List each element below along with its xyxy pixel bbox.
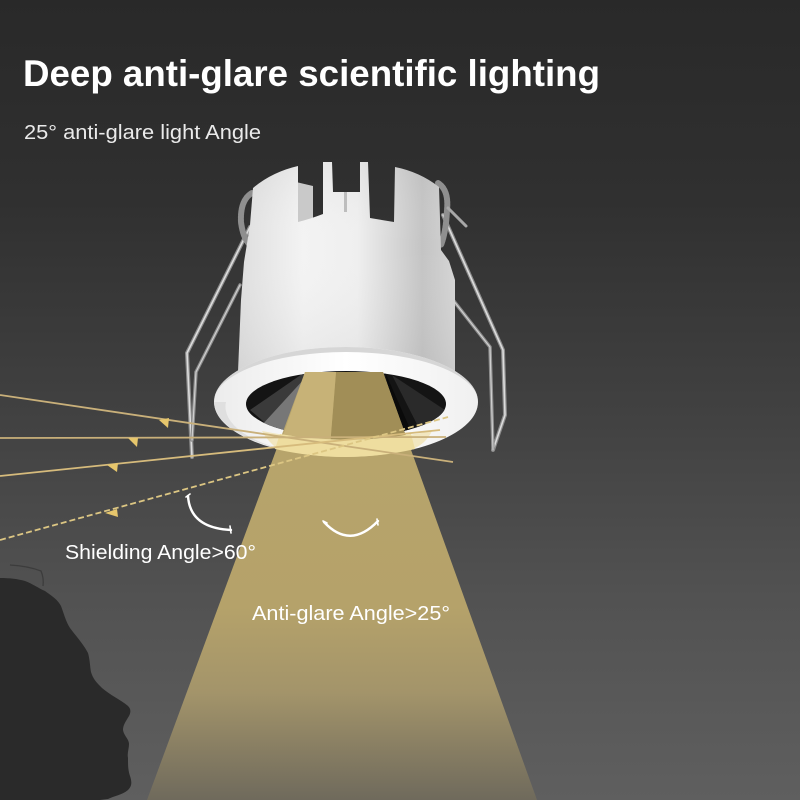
reflector facets: [250, 374, 444, 431]
head profile: [0, 578, 131, 800]
title: Deep anti-glare scientific lighting: [23, 53, 600, 94]
ray 1: [0, 395, 453, 462]
ray direction arrowheads: [105, 418, 169, 517]
ring upper rim shade: [214, 347, 478, 402]
silhouette: human face: [0, 565, 131, 800]
hair wisps: [10, 565, 43, 586]
housing shading: [238, 162, 455, 372]
light beam: [147, 372, 537, 800]
ray 4: dashed shielding line: [0, 417, 448, 540]
beam lower cone: [147, 372, 537, 800]
trim ring: [214, 347, 478, 457]
beam inside reflector, right side: [330, 372, 410, 447]
arc arrow: shielding angle: [186, 494, 231, 533]
spring clip: left: [187, 193, 252, 457]
beam inside reflector, left side: [279, 372, 336, 447]
spring clip: right: [438, 183, 505, 450]
inner wall of the housing: [296, 182, 313, 224]
ray 2: [0, 437, 446, 438]
subtitle: 25° anti-glare light Angle: [24, 122, 261, 144]
icon: downlight fixture: [187, 162, 505, 457]
housing cylinder: [238, 162, 455, 372]
arc arrow: anti-glare angle: [323, 519, 378, 536]
ring left inner band: [214, 402, 300, 453]
centre slot: [344, 192, 347, 212]
glare rays: [0, 395, 453, 540]
ring edge glow: [262, 431, 432, 457]
label: shielding angle: Shielding Angle>60°: [65, 541, 256, 564]
ray 3: [0, 430, 440, 476]
glow on lower ring: [275, 434, 415, 457]
label: anti-glare angle: Anti-glare Angle>25°: [252, 602, 450, 625]
reflector hole: [246, 371, 446, 437]
